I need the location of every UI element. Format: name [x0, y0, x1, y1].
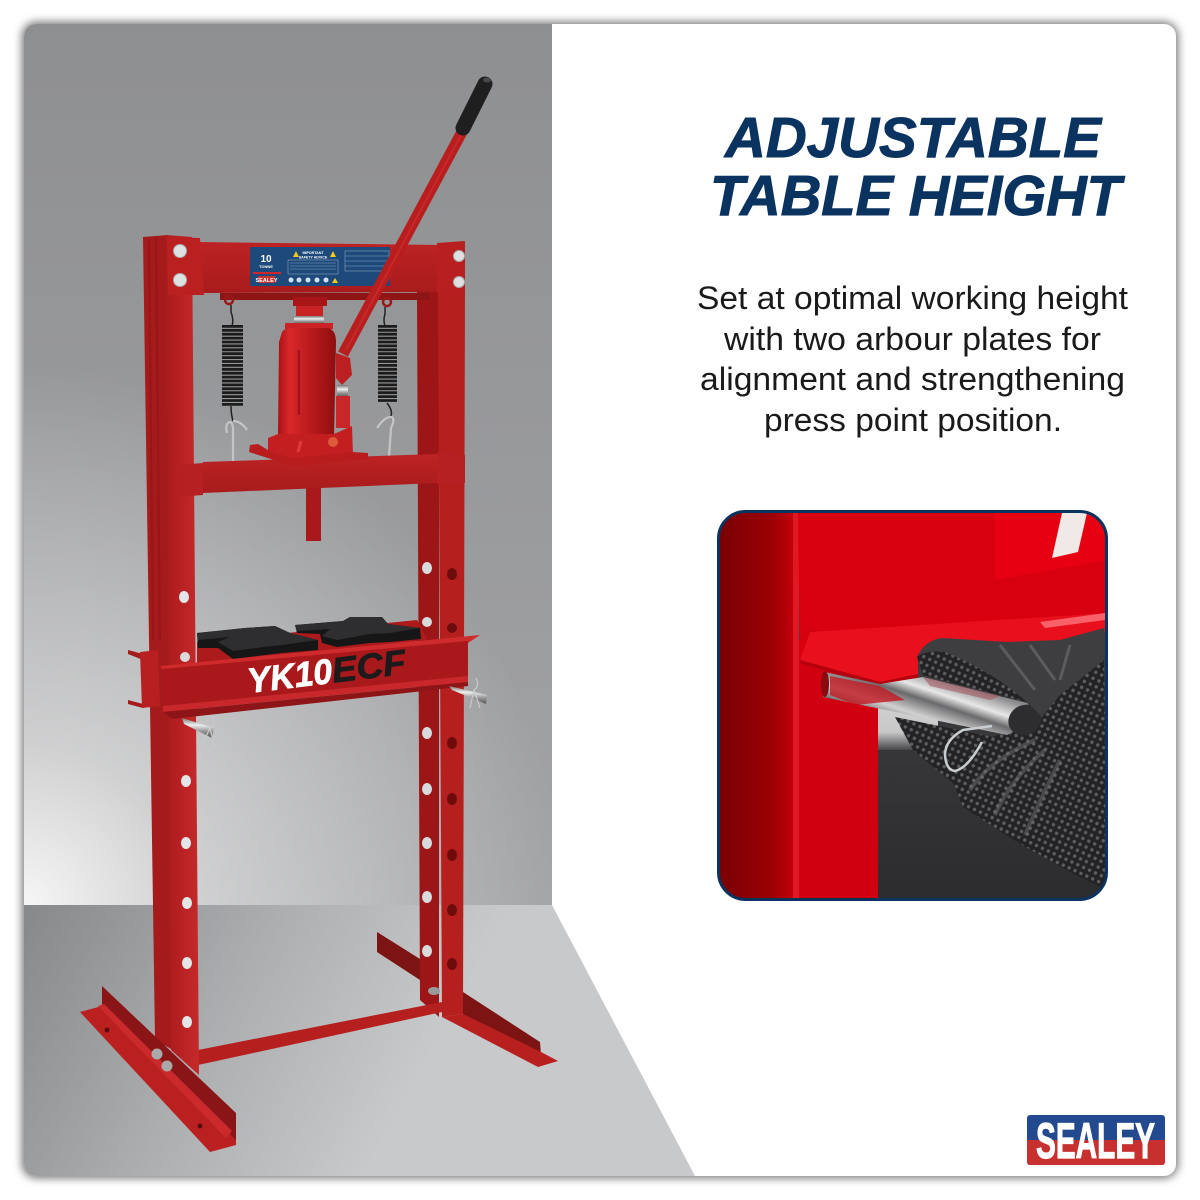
heading: TABLE HEIGHT	[710, 164, 1125, 228]
left foot	[80, 986, 236, 1152]
locking pin	[821, 671, 1047, 741]
palm highlights	[970, 740, 1060, 835]
handle grip	[463, 84, 485, 128]
arbour plate left	[197, 626, 318, 659]
inset photo: locking pin	[718, 511, 1107, 900]
rear channel	[128, 650, 140, 659]
table face	[798, 513, 1105, 640]
left spring	[225, 296, 247, 461]
thumb and upper hand	[917, 628, 1107, 717]
front face	[162, 641, 468, 710]
left upright	[143, 235, 199, 1075]
table flange	[800, 613, 1107, 682]
heading: ADJUSTABLE	[723, 106, 1103, 170]
model name: ECF	[330, 643, 409, 691]
left post	[718, 511, 794, 900]
description text: Set at optimal working height	[697, 280, 1128, 316]
bottle jack	[249, 297, 368, 466]
ram	[306, 488, 321, 541]
description text: press point position.	[764, 402, 1062, 438]
bottom cross bar	[198, 1002, 442, 1065]
product photo panel	[24, 24, 695, 1176]
rear foot	[377, 932, 420, 980]
heading	[710, 106, 1125, 228]
background	[799, 588, 1105, 898]
label advice: IMPORTANT	[302, 251, 324, 255]
inset border	[718, 512, 1106, 900]
right spring	[377, 298, 393, 457]
label warnings	[293, 251, 299, 257]
safety label plate: TONNE	[259, 264, 273, 269]
bolts	[174, 244, 464, 288]
arbour plate right	[295, 617, 421, 647]
description text	[697, 280, 1128, 438]
recessed panel	[995, 511, 1107, 580]
front flange	[160, 635, 480, 671]
safety label plate	[250, 247, 390, 286]
jack base plate	[249, 444, 368, 461]
lower hand	[895, 650, 1107, 890]
floor backdrop	[24, 905, 695, 1176]
pump handle	[336, 78, 491, 385]
wall backdrop	[24, 24, 552, 906]
safety label plate: SAFETY ADVICE	[299, 256, 328, 260]
centre upright	[793, 640, 878, 900]
left table pin	[182, 718, 214, 738]
description text: alignment and strengthening	[700, 361, 1125, 397]
top beam	[167, 237, 465, 300]
middle cross bar	[178, 452, 465, 497]
table surface	[197, 620, 428, 664]
right table pin	[449, 678, 487, 708]
safety label plate: SEALEY	[255, 278, 278, 284]
adjustable table	[128, 617, 480, 719]
hydraulic press	[80, 78, 558, 1152]
white decal	[1052, 513, 1087, 558]
label logo	[258, 276, 275, 283]
right foot	[428, 987, 558, 1067]
right upright	[417, 292, 465, 1017]
label capacity: 10	[260, 254, 272, 265]
model name	[248, 649, 406, 693]
model name: YK10	[245, 652, 335, 701]
cotter clip	[945, 726, 992, 771]
description text: with two arbour plates for	[723, 321, 1101, 357]
